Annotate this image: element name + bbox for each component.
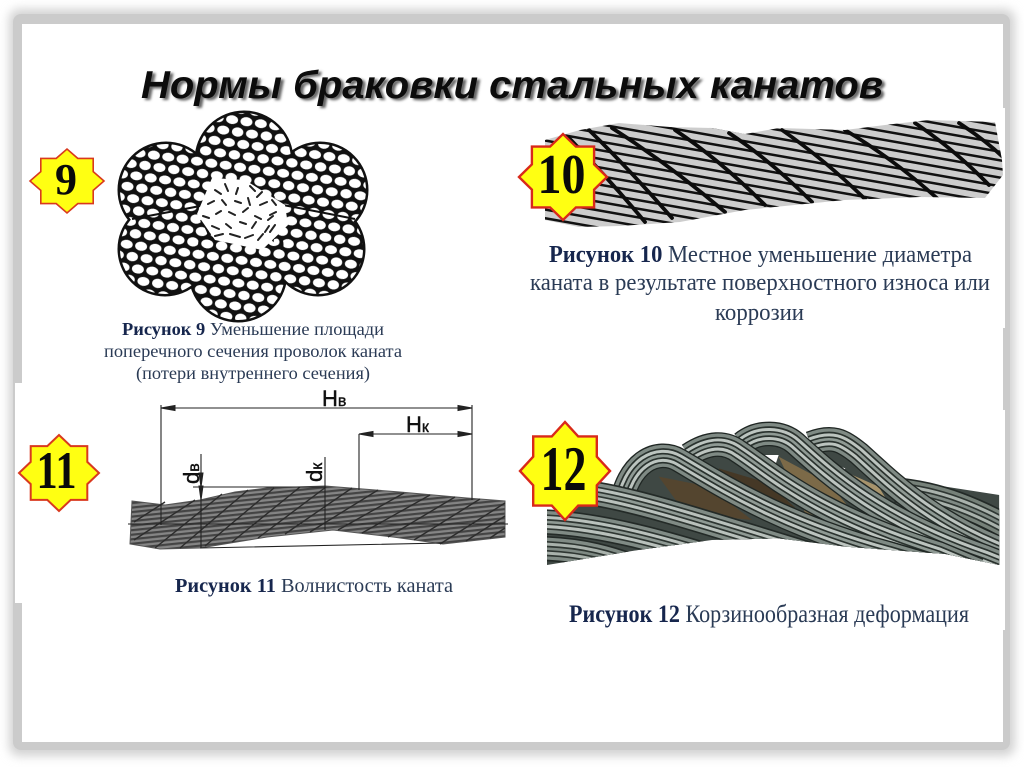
figure 9: rope cross-section xyxy=(120,113,366,320)
dimension labels: dк xyxy=(302,462,327,482)
badge 11 xyxy=(19,435,99,511)
badge 11: 11 xyxy=(36,442,76,500)
rope body xyxy=(547,437,999,567)
caption 10: каната в результате поверхностного износа или xyxy=(530,270,990,296)
caption 11: Рисунок 11 Волнистость каната xyxy=(175,575,453,597)
badge 9: 9 xyxy=(55,155,77,204)
dimension labels xyxy=(179,386,430,484)
figure 11: waviness diagram xyxy=(128,386,508,549)
title: Нормы браковки стальных канатов xyxy=(141,64,883,107)
rope core xyxy=(197,178,288,250)
badge 12 xyxy=(520,422,610,520)
figure 10: worn rope xyxy=(545,120,1003,227)
badge 10 xyxy=(519,134,607,220)
dimension lines xyxy=(128,405,508,548)
badge 9 xyxy=(30,149,104,213)
title: Нормы браковки стальных канатов xyxy=(144,66,886,109)
lower strands xyxy=(532,490,1019,577)
caption 10: Рисунок 10 Местное уменьшение диаметра xyxy=(549,242,972,268)
caption 12: Рисунок 12 Корзинообразная деформация xyxy=(569,601,969,628)
figure 12: basket deformation photo xyxy=(532,434,1019,577)
caption 9: Рисунок 9 Уменьшение площади xyxy=(122,319,384,339)
wavy rope xyxy=(130,486,505,549)
dimension labels: Нк xyxy=(406,412,430,437)
caption 9 xyxy=(104,319,402,384)
caption 10: коррозии xyxy=(715,300,804,326)
caption 9: поперечного сечения проволок каната xyxy=(104,341,402,361)
caption 10 xyxy=(530,242,990,326)
dimension labels: dв xyxy=(179,463,204,484)
rusted core xyxy=(659,455,885,520)
front lower strand xyxy=(596,482,818,544)
dimension labels: Нв xyxy=(322,386,346,411)
caption 9: (потери внутреннего сечения) xyxy=(136,363,370,384)
raised strands xyxy=(620,434,1019,570)
badge 12: 12 xyxy=(540,433,586,504)
badge 10: 10 xyxy=(538,144,586,206)
